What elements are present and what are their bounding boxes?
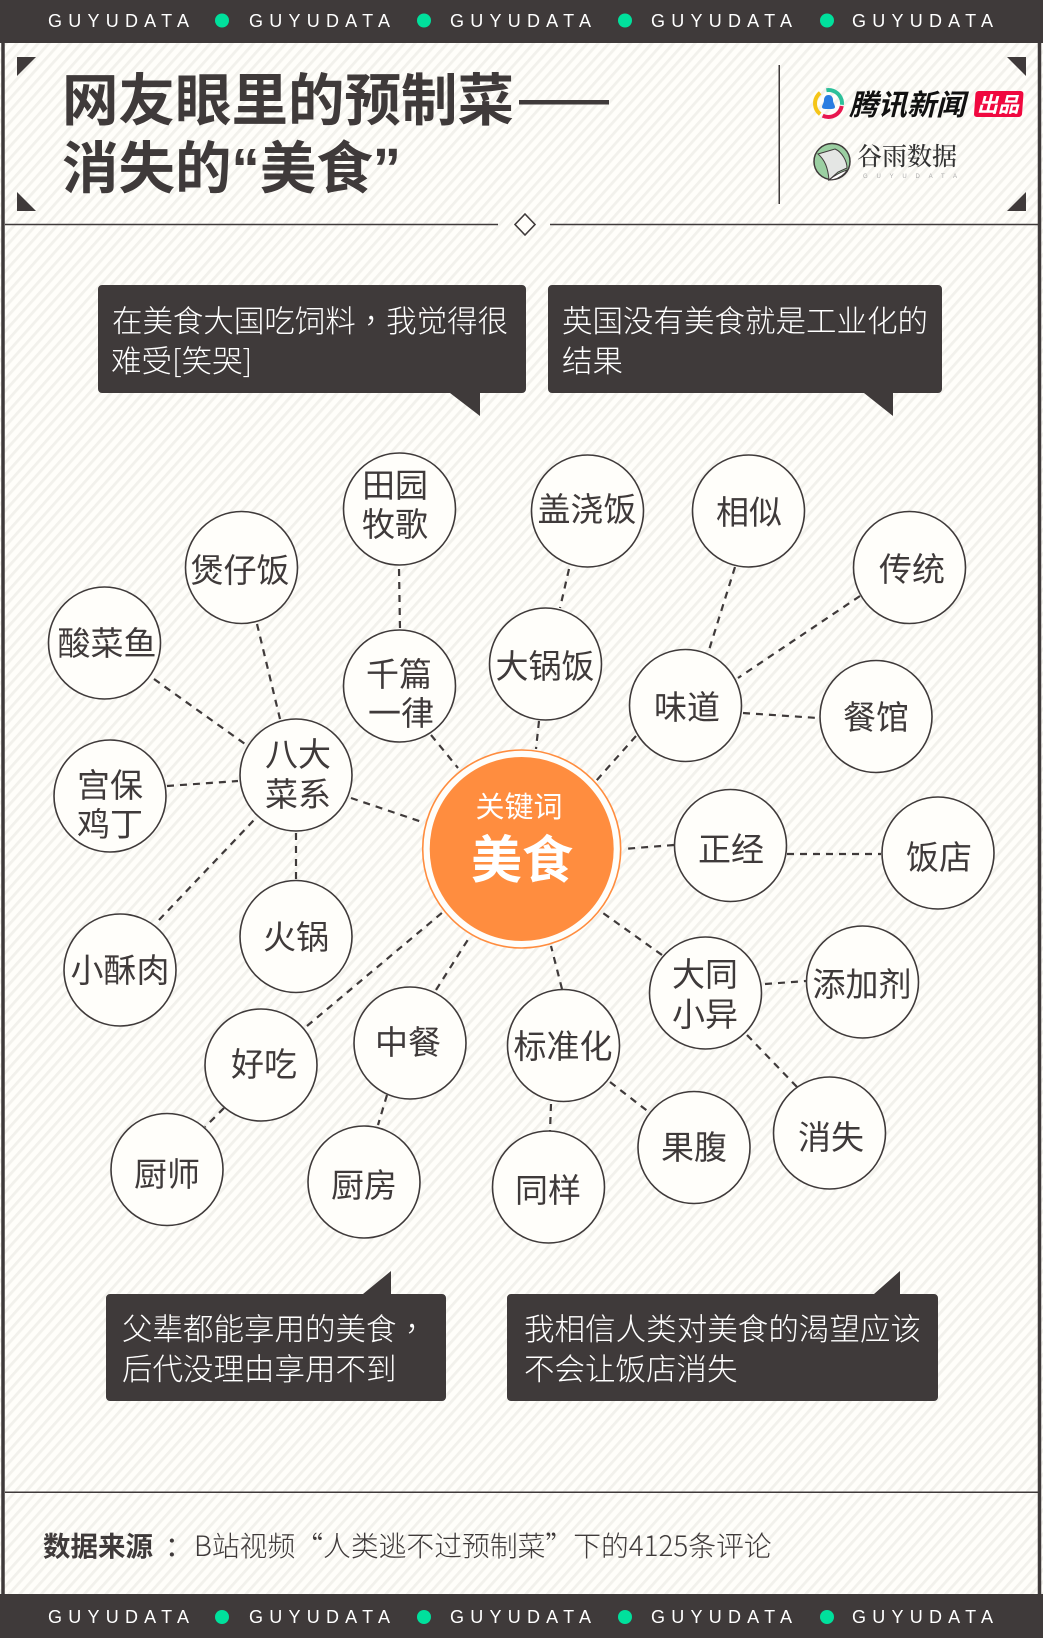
node: 味道: 味道	[654, 689, 720, 726]
top banner	[0, 0, 1043, 43]
node: 餐馆	[820, 660, 932, 772]
node: 宫保鸡丁: 鸡丁	[77, 806, 143, 843]
node: 标准化	[508, 990, 620, 1102]
center node: 美食: 关键词	[475, 791, 563, 824]
node: 相似: 相似	[716, 494, 782, 531]
node: 标准化: 标准化	[514, 1028, 612, 1065]
node: 果腹	[638, 1092, 750, 1204]
top banner: GUYUDATA	[651, 11, 792, 31]
node: 田园牧歌: 牧歌	[362, 506, 428, 543]
node: 煲仔饭: 煲仔饭	[190, 552, 290, 589]
node: 厨房: 厨房	[331, 1167, 397, 1204]
node: 添加剂: 添加剂	[812, 966, 912, 1003]
node: 八大菜系: 菜系	[265, 776, 331, 813]
callout: top left: 难受[笑哭]	[111, 337, 252, 381]
node: 厨师	[111, 1114, 223, 1226]
logo: Guyu Data	[814, 137, 957, 180]
node: 同样	[492, 1131, 604, 1243]
callout: bottom right	[507, 1271, 938, 1401]
node: 盖浇饭	[532, 455, 644, 567]
node: 好吃: 好吃	[231, 1046, 297, 1083]
logo: Guyu Data: 谷雨数据	[857, 137, 957, 173]
node: 小酥肉	[64, 914, 176, 1026]
bottom banner: GUYUDATA	[249, 1607, 390, 1627]
node: 宫保鸡丁: 宫保	[77, 767, 143, 804]
callout: top left	[98, 285, 526, 416]
node: 宫保鸡丁	[54, 740, 166, 852]
node: 大同小异: 大同	[672, 956, 738, 993]
node: 中餐: 中餐	[375, 1024, 441, 1061]
callout: bottom left: 父辈都能享用的美食，	[122, 1305, 427, 1349]
center node: 美食: 美食	[471, 832, 573, 889]
callout: top right	[548, 285, 942, 416]
connector lines	[154, 567, 881, 1131]
center node: 美食	[423, 750, 621, 948]
title	[62, 69, 609, 200]
node: 八大菜系: 八大	[265, 736, 331, 773]
node: 煲仔饭	[186, 512, 298, 624]
node: 好吃	[205, 1009, 317, 1121]
node: 千篇一律	[344, 630, 456, 742]
logo: Tencent News	[809, 84, 1024, 123]
node: 大锅饭: 大锅饭	[496, 648, 594, 685]
node: 千篇一律: 千篇	[366, 656, 432, 693]
logo: Tencent News: 出品	[977, 94, 1020, 117]
node: 中餐	[354, 987, 466, 1099]
node: 八大菜系	[240, 719, 352, 831]
callout: bottom right: 我相信人类对美食的渴望应该	[524, 1313, 921, 1347]
callout: bottom left: 后代没理由享用不到	[122, 1353, 396, 1387]
data source: ：	[165, 1531, 192, 1562]
bottom banner: GUYUDATA	[651, 1607, 792, 1627]
logo: Tencent News: 腾讯新闻	[849, 90, 970, 122]
node: 传统	[854, 512, 966, 624]
callout: top right: 结果	[562, 345, 623, 379]
node: 酸菜鱼: 酸菜鱼	[58, 625, 156, 662]
node: 传统: 传统	[879, 551, 945, 588]
footer divider	[5, 1492, 1038, 1493]
title: 网友眼里的预制菜	[62, 69, 514, 132]
node: 小酥肉: 小酥肉	[70, 952, 170, 989]
node: 盖浇饭: 盖浇饭	[538, 491, 636, 528]
node: 果腹: 果腹	[661, 1129, 727, 1166]
node: 大同小异	[650, 937, 762, 1049]
bottom banner: GUYUDATA	[852, 1607, 993, 1627]
bottom banner: GUYUDATA	[450, 1607, 591, 1627]
top banner: GUYUDATA	[249, 11, 390, 31]
callout: top right: 英国没有美食就是工业化的	[562, 305, 928, 339]
corner marks	[17, 57, 1026, 211]
title: 消失的“美食”	[62, 137, 401, 200]
header divider with diamond	[5, 214, 1038, 235]
top banner: GUYUDATA	[852, 11, 993, 31]
top banner: GUYUDATA	[450, 11, 591, 31]
node: 添加剂	[806, 926, 918, 1038]
node: 厨师: 厨师	[134, 1156, 200, 1193]
node: 大同小异: 小异	[672, 996, 738, 1033]
node: 火锅: 火锅	[263, 919, 329, 956]
node: 饭店	[882, 797, 994, 909]
callout: top left: 在美食大国吃饲料，我觉得很	[112, 297, 508, 341]
node: 同样: 同样	[515, 1172, 581, 1209]
node: 田园牧歌: 田园	[362, 467, 428, 504]
top banner: GUYUDATA	[48, 11, 189, 31]
data source: B站视频“人类逃不过预制菜”下的4125条评论	[194, 1525, 772, 1565]
node: 消失	[774, 1077, 886, 1189]
logo: Guyu Data: GUYUDATA	[863, 174, 957, 180]
bottom banner: GUYUDATA	[48, 1607, 189, 1627]
node: 正经	[674, 790, 786, 902]
node: 正经: 正经	[698, 831, 764, 868]
node: 味道	[630, 650, 742, 762]
callout: bottom left	[106, 1271, 446, 1401]
node: 消失: 消失	[798, 1119, 864, 1156]
node: 酸菜鱼	[48, 587, 160, 699]
node: 相似	[692, 455, 804, 567]
bottom banner	[0, 1594, 1043, 1638]
header vertical divider	[778, 65, 780, 204]
node: 大锅饭	[490, 608, 602, 720]
node: 饭店: 饭店	[906, 839, 972, 876]
node: 火锅	[240, 880, 352, 992]
node: 厨房	[308, 1126, 420, 1238]
data source: 数据来源	[43, 1531, 153, 1562]
node: 田园牧歌	[344, 453, 456, 565]
callout: bottom right: 不会让饭店消失	[524, 1353, 738, 1387]
node: 餐馆: 餐馆	[843, 699, 909, 736]
node: 千篇一律: 一律	[368, 695, 434, 732]
